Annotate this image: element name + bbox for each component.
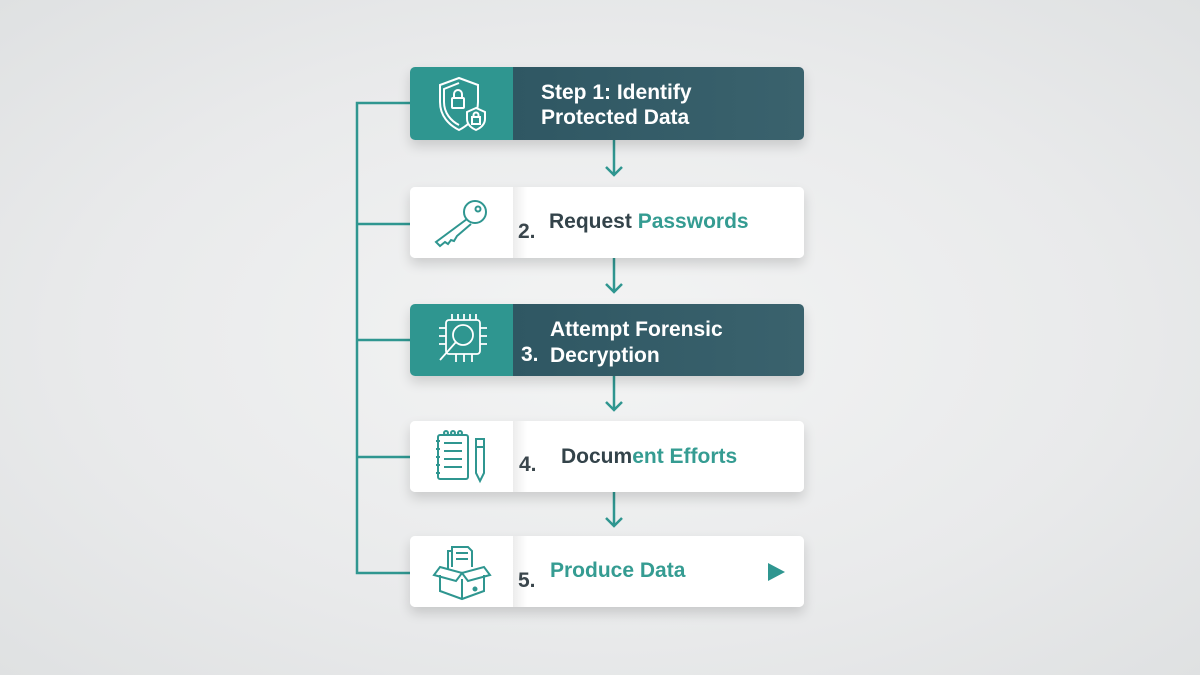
step 3: 3.	[521, 343, 539, 366]
step 3: Attempt Forensic	[550, 318, 723, 341]
play arrow	[768, 563, 785, 581]
icon: notepad pen	[410, 421, 513, 492]
step 5	[410, 536, 804, 607]
step 3	[410, 304, 804, 376]
icon: key	[410, 187, 513, 258]
step 2: Request Passwords	[549, 210, 749, 233]
icon: chip magnifier	[410, 304, 513, 376]
step 4: 4.	[519, 453, 537, 476]
icon: shield lock	[410, 67, 513, 140]
step 5: Produce Data	[550, 559, 685, 582]
step 4: Document Efforts	[561, 445, 737, 468]
step 1	[410, 67, 804, 140]
step 2	[410, 187, 804, 258]
step 5: 5.	[518, 569, 536, 592]
step 1: Protected Data	[541, 106, 689, 129]
step 1: Step 1: Identify	[541, 81, 692, 104]
icon: box of documents	[410, 536, 513, 607]
step 2: 2.	[518, 220, 536, 243]
step 3: Decryption	[550, 344, 660, 367]
step 4	[410, 421, 804, 492]
